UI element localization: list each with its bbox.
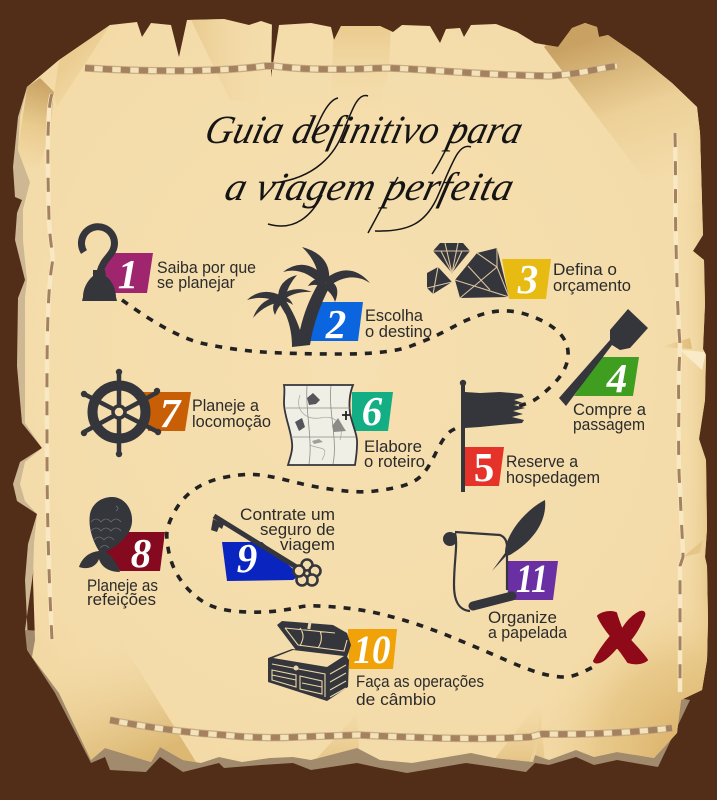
- text: step 10: Faça as operações: [356, 673, 484, 691]
- icon: scroll and quill: [443, 500, 545, 611]
- text: step 10: de câmbio: [356, 691, 436, 709]
- step 4: oar: [559, 309, 648, 434]
- step 8: fish: [79, 497, 165, 609]
- badge 9: 9: [237, 535, 257, 581]
- badge 1: 1: [118, 251, 138, 297]
- step 6: map: [284, 385, 425, 471]
- icon: flag: [460, 380, 525, 492]
- badge 3: 3: [517, 256, 538, 302]
- text: step 5: Reserve a: [506, 453, 579, 471]
- badge 3: [502, 256, 551, 302]
- text: step 8: Planeje as: [87, 577, 158, 595]
- text: step 3: orçamento: [553, 277, 631, 295]
- text: step 4: passagem: [573, 416, 645, 434]
- text: step 6: [364, 438, 425, 471]
- text: step 10: [356, 673, 484, 709]
- icon: ship wheel: [81, 369, 161, 457]
- text: step 11: a papelada: [488, 624, 568, 642]
- text: step 3: Defina o: [553, 261, 617, 279]
- title: a viagem perfeita: [221, 165, 519, 209]
- text: step 8: refeições: [87, 591, 156, 609]
- text: step 4: [573, 401, 647, 434]
- dashed route: [122, 300, 593, 677]
- icon: hook: [81, 227, 117, 301]
- text: step 6: Elabore: [364, 438, 422, 456]
- text: step 2: [365, 307, 432, 341]
- text: step 1: Saiba por que: [157, 259, 256, 277]
- text: step 2: o destino: [365, 323, 432, 341]
- text: step 1: se planejar: [157, 274, 235, 292]
- badge 4: 4: [606, 355, 627, 401]
- step 7: ship wheel: [81, 369, 271, 457]
- badge 2: 2: [325, 301, 346, 347]
- icon: map: [284, 385, 357, 465]
- badge 5: [465, 444, 504, 490]
- text: step 9: Contrate um: [240, 506, 335, 524]
- step 3: diamonds: [427, 243, 631, 302]
- text: step 2: Escolha: [365, 307, 424, 325]
- text: step 7: [192, 397, 271, 431]
- badge 2: [310, 301, 363, 347]
- badge 1: [102, 251, 153, 297]
- text: step 6: o roteiro: [364, 453, 425, 471]
- badge 11: 11: [516, 556, 548, 601]
- icon: diamonds: [427, 243, 509, 298]
- title: Guia definitivo para: [201, 108, 528, 152]
- badge 7: 7: [160, 390, 182, 436]
- icon: oar: [559, 309, 648, 406]
- text: step 11: Organize: [488, 609, 557, 627]
- step 2: palm trees: [247, 247, 432, 347]
- text: step 11: [488, 609, 568, 642]
- icon: palm trees: [247, 247, 370, 347]
- text: step 1: [157, 259, 256, 292]
- destination X: [594, 612, 647, 663]
- step 9: key: [211, 506, 335, 586]
- icon: fish: [79, 497, 132, 572]
- text: step 7: Planeje a: [192, 397, 260, 415]
- badge 6: 6: [362, 388, 383, 434]
- title: [201, 95, 528, 233]
- text: step 8: [87, 577, 158, 609]
- text: step 7: locomoção: [192, 413, 271, 431]
- badge 6: [352, 388, 393, 434]
- icon: key: [211, 516, 320, 586]
- step 10: treasure chest: [268, 620, 484, 709]
- text: step 9: viagem: [280, 536, 335, 554]
- text: step 5: hospedagem: [506, 469, 600, 487]
- text: step 5: [506, 453, 600, 487]
- text: step 3: [553, 261, 631, 295]
- badge 8: 8: [131, 530, 151, 576]
- text: step 4: Compre a: [573, 401, 647, 419]
- badge 5: 5: [474, 444, 494, 490]
- stitched border: [47, 66, 683, 738]
- badge 10: 10: [354, 627, 390, 672]
- step 11: scroll and quill: [443, 500, 568, 642]
- icon: chest: [268, 620, 351, 701]
- step 1: hook: [81, 227, 256, 301]
- badge 7: [143, 390, 191, 436]
- step 5: flag: [460, 380, 600, 492]
- text: step 9: seguro de: [260, 521, 335, 539]
- text: step 9: [240, 506, 335, 554]
